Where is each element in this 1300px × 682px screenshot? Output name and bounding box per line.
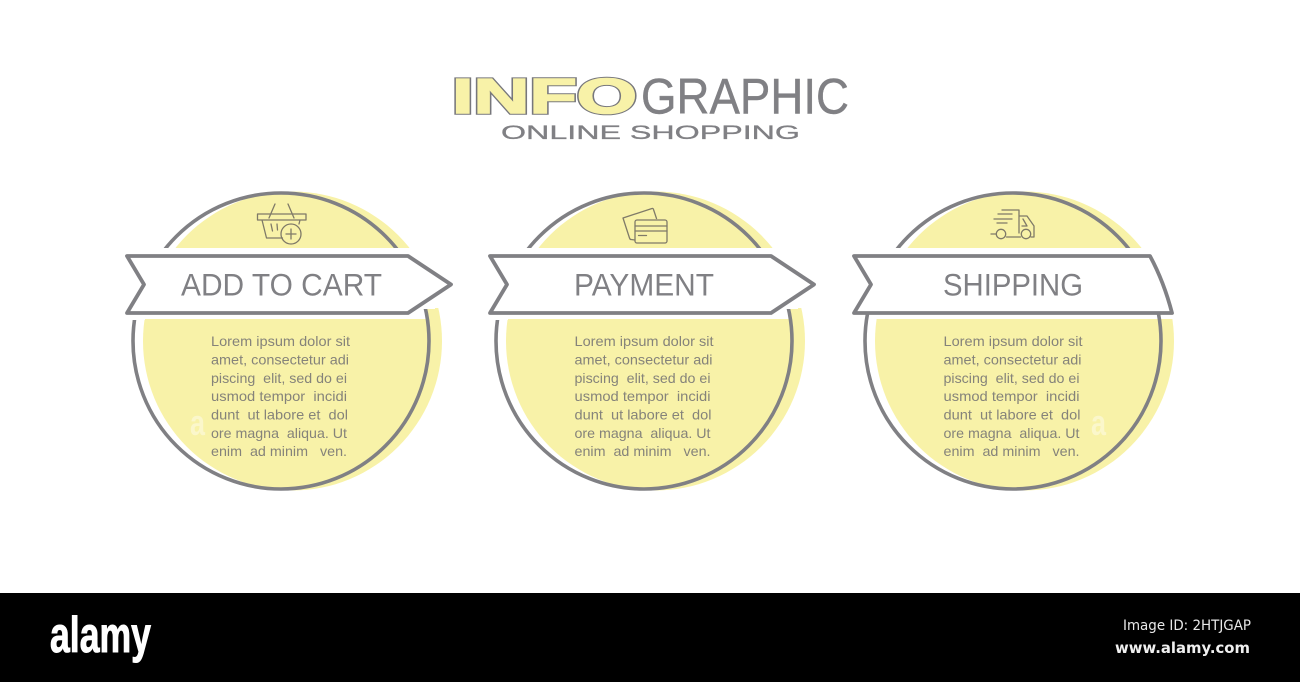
heading: ADD TO CART (181, 266, 382, 302)
circle outline (496, 193, 792, 489)
icon: credit cards (623, 208, 667, 243)
subtitle: ONLINE SHOPPING (501, 122, 800, 144)
body text: amet, consectetur adi (944, 352, 1082, 368)
white band over disc (120, 248, 455, 319)
body text: piscing elit, sed do ei (211, 371, 347, 386)
circle outline (865, 193, 1161, 489)
title: GRAPHIC: GRAPHIC (641, 68, 849, 124)
outline gaps around ribbon (483, 248, 808, 320)
heading: SHIPPING (943, 266, 1083, 302)
body text (211, 334, 350, 459)
body text: ore magna aliqua. Ut (211, 426, 347, 441)
body text: Lorem ipsum dolor sit (944, 334, 1083, 349)
body text: dunt ut labore et dol (944, 408, 1080, 422)
title: INFO outline layer: INFO (452, 70, 637, 124)
faint watermark letter: a (190, 402, 206, 443)
outline gaps around ribbon (120, 248, 445, 320)
ribbon arrow (490, 256, 814, 313)
footer bar (0, 593, 1300, 682)
heading: PAYMENT (574, 266, 714, 302)
body text: amet, consectetur adi (211, 352, 349, 368)
icon: shopping basket (258, 204, 306, 244)
faint watermark letter: a (1091, 402, 1107, 443)
body text: piscing elit, sed do ei (944, 371, 1080, 386)
image id: Image ID: 2HTJGAP (1123, 618, 1251, 634)
icon: delivery truck (991, 210, 1034, 239)
body text: Lorem ipsum dolor sit (211, 334, 350, 349)
white band over disc (848, 248, 1178, 319)
body text: amet, consectetur adi (574, 352, 712, 368)
yellow disc (875, 192, 1174, 490)
body text: usmod tempor incidi (211, 389, 347, 404)
panel: payment (483, 192, 818, 490)
ribbon banner (854, 256, 1172, 313)
body text: usmod tempor incidi (574, 389, 710, 404)
panel: shipping (848, 192, 1178, 490)
body text (574, 334, 714, 459)
yellow disc (143, 192, 442, 490)
website: www.alamy.com (1115, 639, 1250, 657)
body text: ore magna aliqua. Ut (944, 426, 1080, 441)
panel: add to cart (120, 192, 455, 490)
yellow disc (506, 192, 805, 490)
body text: enim ad minim ven. (944, 444, 1080, 459)
footer logo: alamy (50, 607, 151, 663)
body text: piscing elit, sed do ei (574, 371, 710, 386)
body text: usmod tempor incidi (944, 389, 1080, 404)
body text: Lorem ipsum dolor sit (574, 334, 714, 349)
title: INFO yellow fill: INFO (452, 70, 637, 124)
body text: enim ad minim ven. (211, 444, 347, 459)
body text (944, 334, 1083, 459)
circle outline (133, 193, 429, 489)
body text: dunt ut labore et dol (211, 408, 348, 422)
ribbon arrow (127, 256, 451, 313)
outline gap above ribbon (848, 248, 1178, 258)
white band over disc (483, 248, 818, 319)
title block (452, 68, 849, 144)
body text: enim ad minim ven. (574, 444, 710, 459)
body text: dunt ut labore et dol (574, 408, 712, 422)
body text: ore magna aliqua. Ut (574, 426, 711, 441)
